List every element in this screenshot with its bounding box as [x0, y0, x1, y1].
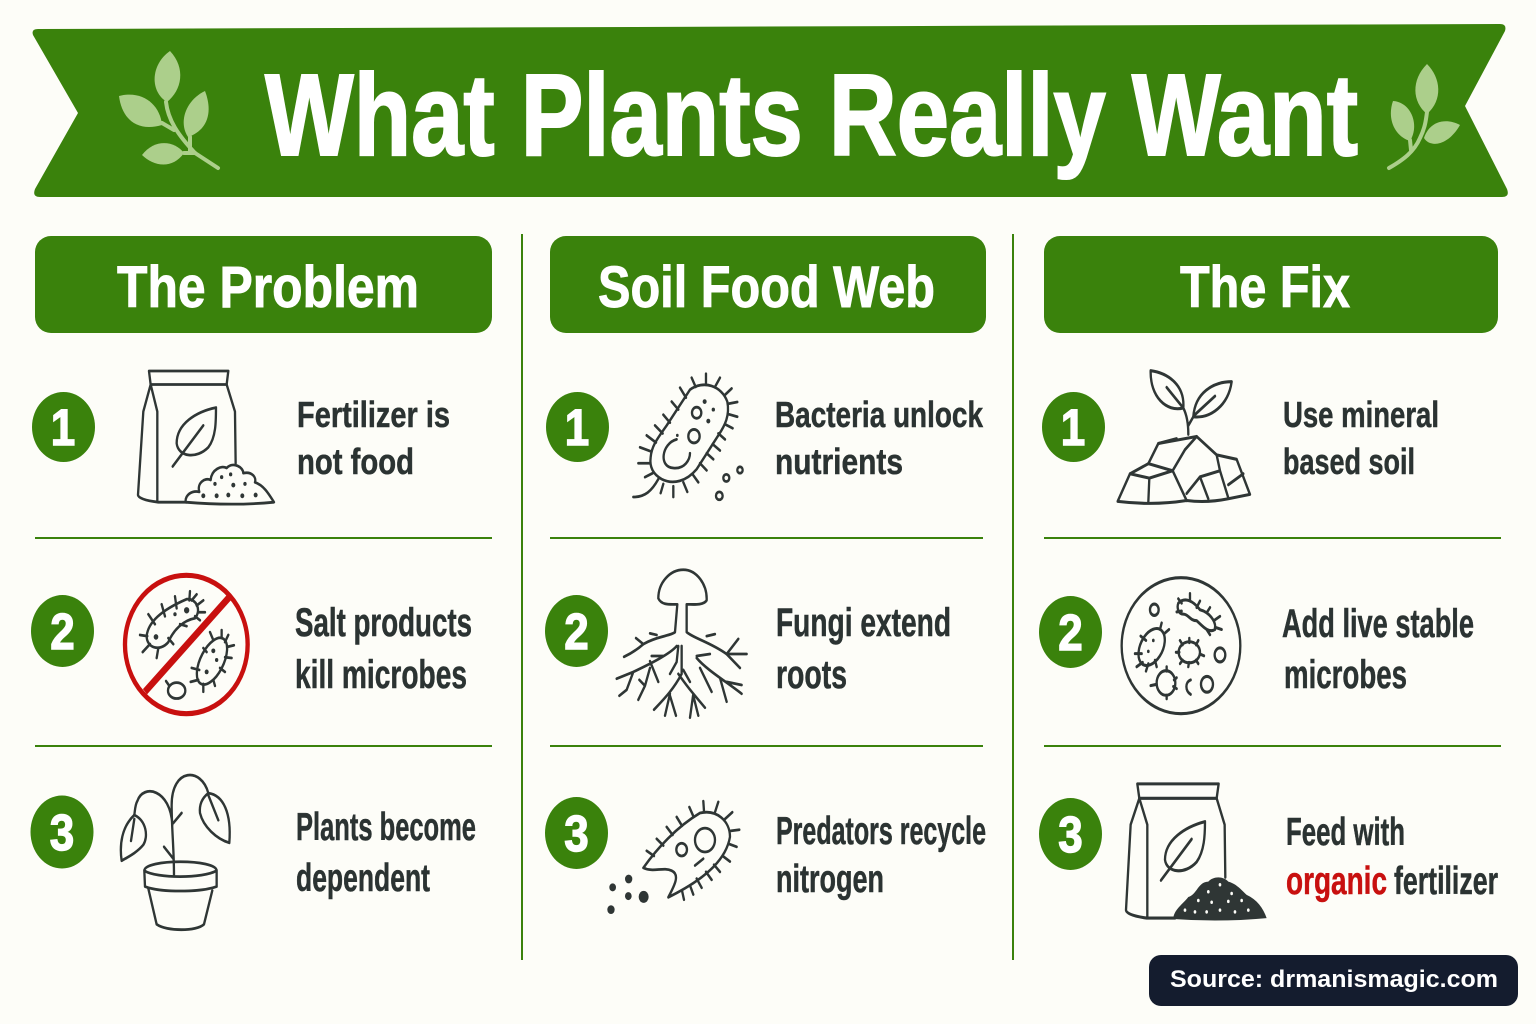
text: feed with organic fertilizer: Feed with	[1286, 811, 1405, 854]
icon: left leaf sprig	[119, 51, 218, 168]
number badge 1: 1	[1061, 400, 1085, 457]
number badge 2: 2	[50, 604, 75, 661]
text: predators recycle nitrogen	[776, 810, 986, 901]
heading: soil food web	[550, 236, 986, 333]
number badge 3: 3	[50, 805, 74, 862]
number badge 2	[1039, 596, 1102, 668]
text: use mineral based soil: based soil	[1283, 441, 1415, 482]
text: salt products kill microbes: Salt products	[295, 601, 472, 645]
number badge 2	[545, 595, 608, 667]
number badge 2: 2	[564, 604, 589, 661]
text: fertilizer is not food: Fertilizer is	[297, 394, 450, 435]
number badge 3: 3	[1058, 807, 1083, 864]
text: feed with organic fertilizer	[1286, 811, 1498, 903]
text: predators recycle nitrogen: Predators recycle	[776, 810, 986, 853]
text: bacteria unlock nutrients: nutrients	[775, 441, 903, 482]
number badge 1	[546, 392, 609, 462]
text: add live stable microbes	[1282, 602, 1474, 697]
icon: petri dish of live microbes	[1122, 578, 1240, 714]
number badge 3	[30, 796, 94, 868]
text: plants become dependent: Plants become	[296, 806, 476, 849]
text: use mineral based soil	[1283, 394, 1439, 482]
icon: bacteria	[633, 374, 743, 500]
source badge	[1149, 955, 1518, 1006]
number badge 3	[545, 797, 608, 869]
text: fertilizer is not food: not food	[297, 441, 414, 482]
icon: wilted plant in pot	[121, 775, 230, 930]
heading: the fix	[1044, 236, 1498, 333]
panel: soil food web	[545, 236, 986, 914]
number badge 3: 3	[564, 806, 589, 863]
text: plants become dependent: dependent	[296, 857, 430, 900]
column divider	[1012, 234, 1014, 960]
number badge 2: 2	[1058, 605, 1083, 662]
number badge 1	[1042, 392, 1105, 462]
text: bacteria unlock nutrients	[775, 394, 984, 482]
text: add live stable microbes: microbes	[1284, 653, 1407, 697]
text: use mineral based soil: Use mineral	[1283, 394, 1439, 435]
text: fertilizer is not food	[297, 394, 450, 482]
icon: no microbes sign	[125, 575, 248, 714]
number badge 2	[31, 595, 94, 667]
heading: the problem: The Problem	[117, 255, 419, 320]
icon: right leaf sprig	[1389, 64, 1460, 168]
text: fungi extend roots	[776, 601, 951, 697]
icon: fungi roots	[617, 570, 747, 718]
title banner	[33, 24, 1508, 197]
text: plants become dependent	[296, 806, 476, 900]
text: predators recycle nitrogen: nitrogen	[776, 858, 884, 901]
panel: the problem	[30, 236, 492, 930]
icon: organic fertilizer bag	[1126, 784, 1267, 921]
text: feed with organic fertilizer: organic	[1286, 860, 1387, 903]
text: fungi extend roots: roots	[776, 653, 847, 697]
heading: the fix: The Fix	[1180, 255, 1350, 320]
heading: soil food web: Soil Food Web	[598, 255, 935, 320]
text: salt products kill microbes: kill microbes	[295, 653, 467, 697]
number badge 1: 1	[51, 400, 75, 457]
number badge 1: 1	[565, 400, 589, 457]
icon: seedling on mineral rocks	[1118, 371, 1250, 503]
source badge: Source: drmanismagic.com	[1170, 966, 1498, 993]
text: fungi extend roots: Fungi extend	[776, 601, 951, 645]
text: bacteria unlock nutrients: Bacteria unlock	[775, 394, 984, 435]
column divider	[521, 234, 523, 960]
heading: the problem	[35, 236, 492, 333]
icon: predator microbe	[607, 801, 739, 914]
text: salt products kill microbes	[295, 601, 472, 697]
icon: fertilizer bag	[138, 371, 274, 504]
number badge 3	[1039, 798, 1102, 870]
panel: the fix	[1039, 236, 1501, 921]
number badge 1	[32, 392, 95, 462]
